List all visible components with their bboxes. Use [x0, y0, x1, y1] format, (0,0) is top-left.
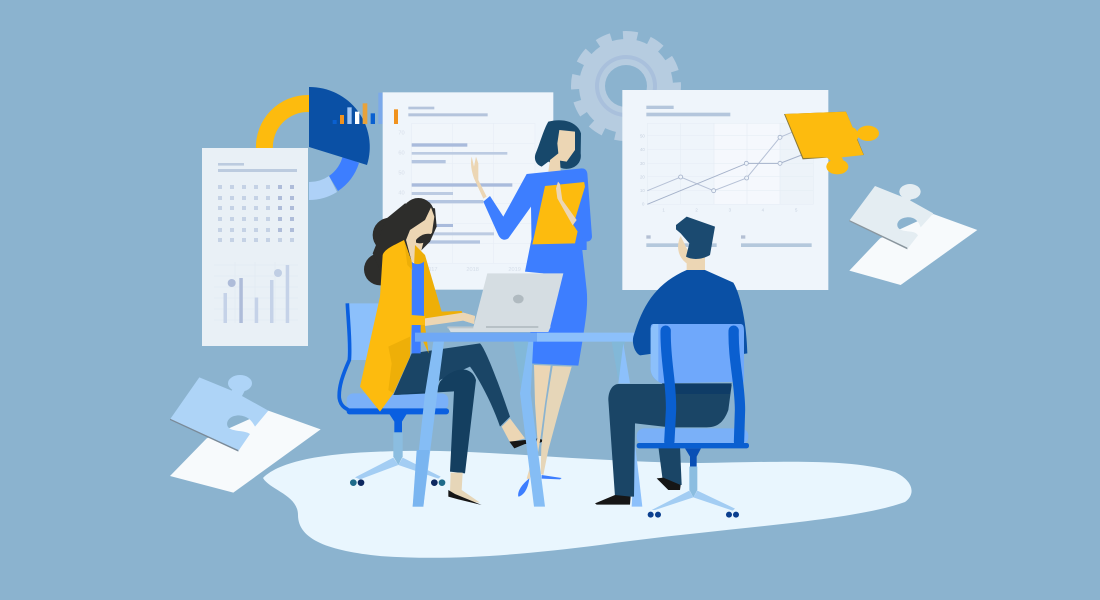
line chart: 1 — [662, 207, 665, 212]
chair seat — [637, 428, 749, 448]
raised hand — [471, 157, 487, 199]
axis labels: 70 — [398, 130, 405, 136]
line chart: 5 — [795, 207, 798, 212]
line chart: 20 — [640, 174, 645, 179]
floor blob — [263, 451, 912, 558]
hand over laptop — [463, 313, 475, 324]
blouse — [412, 262, 424, 353]
face — [406, 207, 434, 265]
puzzle pair: right — [849, 184, 977, 285]
line chart: 30 — [640, 161, 645, 166]
trousers — [608, 383, 732, 497]
chair back — [651, 324, 744, 383]
jacket — [360, 240, 464, 412]
legs — [527, 365, 551, 480]
line chart: 40 — [640, 147, 645, 152]
middle report panel — [383, 92, 553, 290]
seated man — [595, 217, 749, 518]
heels — [518, 478, 529, 497]
axis labels — [398, 130, 521, 273]
laptop — [447, 273, 563, 332]
table and laptop — [413, 273, 637, 507]
chair: woman — [339, 303, 449, 486]
standing woman — [518, 183, 587, 497]
axis labels: 2017 — [425, 267, 438, 273]
face — [548, 130, 575, 172]
raised arm — [483, 168, 587, 250]
folder — [532, 182, 588, 244]
axis labels: 2019 — [508, 267, 521, 273]
dot matrix — [218, 185, 294, 242]
axis labels: 50 — [398, 170, 405, 176]
hair — [364, 198, 437, 285]
standing woman upper body — [471, 120, 592, 250]
gear — [573, 33, 679, 139]
axis labels: 2018 — [466, 267, 479, 273]
axis labels: 40 — [398, 190, 405, 196]
puzzle pair: bottom left — [170, 375, 321, 493]
chair base — [648, 448, 739, 518]
trousers — [393, 343, 510, 473]
forearm — [573, 168, 592, 241]
line chart: 4 — [762, 207, 765, 212]
small bar chart — [214, 262, 298, 323]
line chart: 50 — [640, 133, 645, 138]
hands — [425, 313, 475, 326]
jacket — [633, 270, 747, 355]
horizontal bars — [412, 143, 512, 244]
legend — [646, 235, 812, 247]
dress — [525, 183, 587, 366]
mini bars over donut — [333, 93, 383, 124]
shoes — [595, 478, 681, 505]
line chart: 2 — [695, 207, 698, 212]
right report panel — [622, 90, 828, 290]
head — [676, 217, 715, 272]
table top — [415, 333, 637, 342]
left report panel — [202, 148, 308, 346]
line chart: 3 — [729, 207, 732, 212]
axis labels: 60 — [398, 150, 405, 156]
hair — [535, 120, 581, 169]
puzzle piece: yellow — [784, 112, 879, 174]
legs and shoes — [448, 418, 545, 505]
table legs — [413, 342, 545, 507]
chair struts — [666, 331, 740, 442]
hand on folder — [556, 182, 577, 225]
line chart: 10 — [640, 188, 645, 193]
far table leg — [612, 342, 625, 380]
seated woman with chair — [339, 198, 545, 505]
line chart: 0 — [642, 201, 645, 206]
donut chart — [256, 87, 370, 200]
line chart — [640, 123, 813, 212]
